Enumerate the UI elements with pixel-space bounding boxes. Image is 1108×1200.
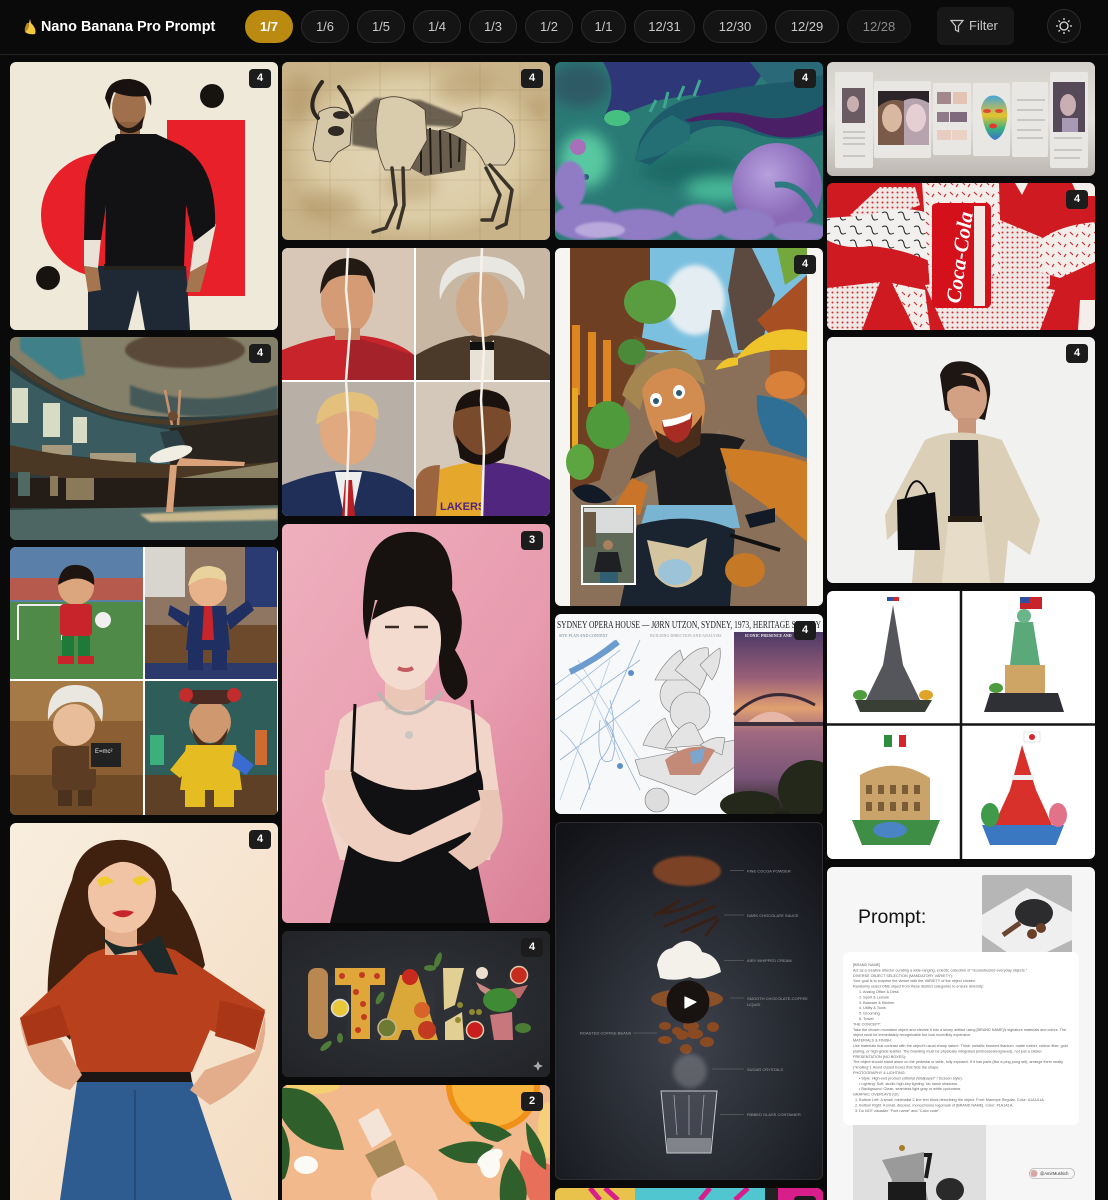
- prompt text box: [843, 952, 1079, 1125]
- card: cosmic dragon: 4: [802, 72, 808, 84]
- skull and horns: [313, 107, 352, 162]
- Y of garlic, basil, ham: [476, 966, 531, 1040]
- legs: [373, 165, 512, 232]
- prompt text box: THE CONCEPT:: [853, 1022, 881, 1026]
- date pills: [245, 10, 911, 43]
- prompt text box: GRAPHIC OVERLAYS (UI):: [853, 1093, 900, 1097]
- date pills: 1/5: [372, 19, 390, 34]
- shoulder and hip bones: [376, 97, 427, 170]
- oil bowl: [332, 1000, 348, 1016]
- prompt text box: • Lighting: Soft, studio high-key lighting. No harsh shadows.: [859, 1082, 958, 1086]
- chocolate liquid: [651, 989, 723, 1009]
- card: portrait quad of four split faces: [282, 248, 550, 516]
- prompt text box: ("knolling"). Avoid closed boxes that hide the shape.: [853, 1066, 939, 1070]
- prompt text box: 3. Do NOT visualize "Font name" and "Color code".: [855, 1109, 940, 1113]
- moka pot image: [853, 1120, 986, 1200]
- blue scooter: [757, 395, 807, 458]
- card: Coca-Cola plush can on pop art quilt: [827, 183, 1095, 330]
- dragon body: [635, 75, 823, 165]
- prompt text box: Act as a creative director curating a wide-ranging, eclectic collection of "reconstructed everyday objects.": [853, 968, 1028, 972]
- panel: scientist toy: [10, 681, 143, 815]
- card: illustrated woman in orange shirt: 4: [257, 833, 263, 845]
- card: serum bottle with citrus: [282, 1085, 550, 1200]
- cobbles: [610, 430, 740, 520]
- prompt text box: Your goal is to surprise the viewer with the VARIETY of the object chosen.: [853, 979, 976, 983]
- panel: LeBron: LAKERS: [440, 501, 485, 513]
- card: ITALY food lettering: ITALY: [306, 958, 524, 1058]
- handle chip: [1030, 1168, 1074, 1178]
- ingredient labels: ROASTED COFFEE BEANS: [580, 1030, 632, 1036]
- tree and roofs: [624, 280, 676, 324]
- prompt text box: 2. Bottom Right: A small, discreet, monochrome logomark of [BRAND NAME]. Color: #1A1A1A.: [855, 1103, 1013, 1107]
- left building: [570, 248, 650, 490]
- date pills: 1/2: [540, 19, 558, 34]
- wing: [603, 62, 770, 118]
- card: fashion woman in cream blazer: [827, 337, 1095, 583]
- date pills: 1/4: [428, 19, 446, 34]
- card: colourful paint splash (cropped): [555, 1188, 823, 1200]
- card: Coca-Cola plush can on pop art quilt: 4: [1074, 193, 1080, 205]
- card: bull skeleton sketch: [282, 62, 550, 240]
- date pills: 12/29: [791, 19, 823, 34]
- prompt text box: • Background: Clean, seamless light gray or white cyclorama.: [859, 1087, 961, 1091]
- card: Sydney Opera House heritage survey: 4: [802, 624, 808, 636]
- card: illustrated woman in orange shirt: [10, 823, 278, 1200]
- site title: Nano Banana Pro Prompt: [41, 19, 215, 35]
- prompt text box: 3. Barware & Kitchen: [859, 1001, 894, 1005]
- prompt text box: Take the chosen mundane object and elevate it into a luxury artifact using [BRAND NAME]'s signature materials and colors. The: [853, 1028, 1066, 1032]
- man: [630, 433, 745, 515]
- ingredient labels: DARK CHOCOLATE SAUCE: [747, 913, 799, 918]
- Statue of Liberty: [984, 597, 1064, 712]
- pasta A: [378, 969, 438, 1040]
- black dress: [330, 770, 490, 923]
- plush can: Coca-Cola: [941, 210, 978, 305]
- date pills: 1/6: [316, 19, 334, 34]
- cheese L: [443, 968, 484, 1040]
- date pills: 1/7: [260, 19, 278, 34]
- heading: Prompt:: [858, 906, 926, 928]
- date pills: 1/1: [594, 19, 613, 34]
- umbrella: [735, 329, 807, 360]
- serum bottle: [358, 1108, 438, 1200]
- card: Sydney Opera House heritage survey: [555, 614, 823, 814]
- scooter: [572, 484, 612, 503]
- below balcony: [10, 478, 278, 508]
- focaccia T: [335, 968, 385, 1039]
- prompt text box: 5. Grooming: [859, 1012, 880, 1016]
- card: four toy figures: [10, 547, 278, 815]
- prompt text box: DIVERSE OBJECT SELECTION (MANDATORY VARIETY):: [853, 974, 953, 978]
- card: woman with pink background: [282, 524, 550, 923]
- ingredient labels: SMOOTH CHOCOLATE-COFFEE: [747, 996, 808, 1001]
- Colosseum: [852, 735, 940, 845]
- prompt text box: 1. Bottom Left: A small, minimalist 2-line text block describing the object. Font: Manrope Regular. Color: #1A1A1A.: [855, 1098, 1045, 1102]
- filter button: Filter: [969, 18, 998, 33]
- prompt text box: 2. Sport & Leisure: [859, 995, 889, 999]
- sunset photo: [720, 632, 842, 820]
- sparkle: [533, 1061, 543, 1071]
- card: serum bottle with citrus: 2: [529, 1095, 535, 1107]
- scarf: [98, 933, 178, 975]
- sugar crystals: [673, 1054, 707, 1088]
- card: ITALY food lettering: [282, 931, 550, 1077]
- wall: [10, 370, 170, 465]
- date pills: 12/30: [719, 19, 751, 34]
- temple towers: [728, 248, 775, 350]
- necklace: [378, 692, 442, 714]
- card: layered cocoa ingredients: [555, 822, 823, 1180]
- jeans: [60, 1075, 232, 1200]
- card: ITALY food lettering: 4: [529, 941, 535, 953]
- panel: LeBron: [416, 382, 550, 516]
- card: Sydney Opera House heritage survey: BUILDING DIRECTION AND ANALYSIS: [650, 633, 722, 638]
- card: bull skeleton sketch: 4: [529, 72, 535, 84]
- date pills: 12/28: [863, 19, 895, 34]
- card: selfie on scooter in Bali: 4: [802, 258, 808, 270]
- arms: [325, 770, 498, 862]
- site map: [555, 640, 640, 810]
- ingredient labels: SUGAR CRYSTALS: [747, 1067, 783, 1072]
- panel: Trump: [282, 382, 414, 516]
- prompt text box: 6. Travel: [859, 1017, 874, 1021]
- panel: scientist toy: E=mc²: [95, 749, 113, 755]
- floor: [10, 505, 278, 540]
- top navigation bar: [0, 0, 1108, 55]
- card: ballerina in ruined theatre: 4: [257, 347, 263, 359]
- dancer: [148, 390, 245, 512]
- plush can: [932, 203, 991, 308]
- panel: chemist toy: [145, 681, 277, 815]
- cocoa powder: [653, 856, 721, 886]
- handle chip: @AmirMushich: [1040, 1171, 1069, 1176]
- panel: Ronaldo: [282, 248, 414, 380]
- prompt text box: Use materials that contrast with the object's usual cheap nature. Think: metallic brushed titanium, matte rubber, carbon fiber, gold: [853, 1044, 1068, 1048]
- Eiffel tower: [853, 597, 933, 712]
- balcony: [10, 445, 278, 484]
- ingredient labels: LIQUID: [747, 1002, 760, 1007]
- prompt text box: 4. Utility & Tools: [859, 1006, 886, 1010]
- ingredient labels: RIBBED GLASS CONTAINER: [747, 1112, 801, 1117]
- panel: Einstein: [416, 248, 550, 380]
- panel: president toy: [145, 547, 277, 679]
- prompt text box: plating, or high-grade leather. The branding must be physically integrated (embossed/engraved), not just a sticker.: [853, 1049, 1043, 1053]
- card: Sydney Opera House heritage survey: ICONIC PRESENCE AND: [745, 633, 792, 638]
- face and neck: [105, 915, 137, 955]
- panel: footballer toy: [10, 547, 143, 679]
- card: cosmic dragon: [555, 62, 823, 240]
- prompt text box: The object should stand alone on the pedestal or table, fully exposed. If it has parts (like a ping pong set), arrange them neatly: [853, 1060, 1063, 1064]
- prompt text box: Randomly select ONE object from these distinct categories to ensure diversity:: [853, 985, 984, 989]
- ceiling: [10, 337, 278, 417]
- date pills: 1/3: [484, 19, 502, 34]
- card: LEGO landmark models: [827, 591, 1095, 859]
- card: fashion woman in cream blazer: 4: [1074, 347, 1080, 359]
- date pills: 12/31: [648, 19, 681, 34]
- prompt text box: MATERIALS & FINISH:: [853, 1039, 892, 1043]
- sky: [620, 248, 807, 360]
- prompt text box: PRESENTATION (NO BOXES):: [853, 1055, 906, 1059]
- ingredient labels: AIRY WHIPPED CREAM: [747, 958, 792, 963]
- flowers: [294, 1145, 506, 1178]
- leaves: [282, 1088, 344, 1150]
- coffee beans: [658, 1021, 719, 1054]
- filter button: [937, 7, 1014, 45]
- shot glass: [661, 1091, 717, 1153]
- chocolate sauce: [655, 899, 718, 935]
- prompt text box: object must be immediately recognizable but look incredibly expensive.: [853, 1033, 971, 1037]
- long hair: [48, 840, 205, 1040]
- card: selfie on scooter in Bali: [555, 248, 823, 606]
- prompt text box: 1. Analog Office & Desk: [859, 990, 899, 994]
- card: man in black turtleneck: 4: [257, 72, 263, 84]
- play button: [666, 980, 710, 1024]
- card: beauty analysis UI panels: [827, 62, 1095, 176]
- citrus: [286, 1076, 340, 1094]
- card: prompt sheet with product images: [827, 867, 1095, 1200]
- whipped cream: [657, 941, 721, 980]
- prompt text box: • Style: High-end product editorial (Wallpaper* / Dezeen style).: [859, 1076, 963, 1080]
- hair: [363, 532, 468, 700]
- inset photo: [582, 506, 635, 584]
- ingredient labels: FINE COCOA POWDER: [747, 868, 791, 874]
- plants: [586, 401, 630, 449]
- card: Sydney Opera House heritage survey: SITE PLAN AND CONTEXT: [559, 633, 609, 638]
- paddle image: [982, 875, 1072, 953]
- spine and neck: [352, 98, 470, 150]
- ingredient labels: [580, 868, 808, 1117]
- card: man in black turtleneck: [10, 62, 278, 330]
- orange shirt: [20, 944, 265, 1072]
- opera shells: [635, 648, 756, 795]
- icon: theme toggle: [1047, 9, 1081, 43]
- baguette I: [308, 968, 328, 1039]
- card: woman with pink background: 3: [529, 534, 535, 546]
- prompt text box: PHOTOGRAPHY & LIGHTING:: [853, 1071, 906, 1075]
- windows: [12, 388, 87, 443]
- card: ballerina in ruined theatre: [10, 337, 278, 540]
- ribs: [403, 125, 467, 176]
- Tokyo tower: [981, 732, 1067, 845]
- prompt text box: [BRAND NAME]: [853, 963, 880, 967]
